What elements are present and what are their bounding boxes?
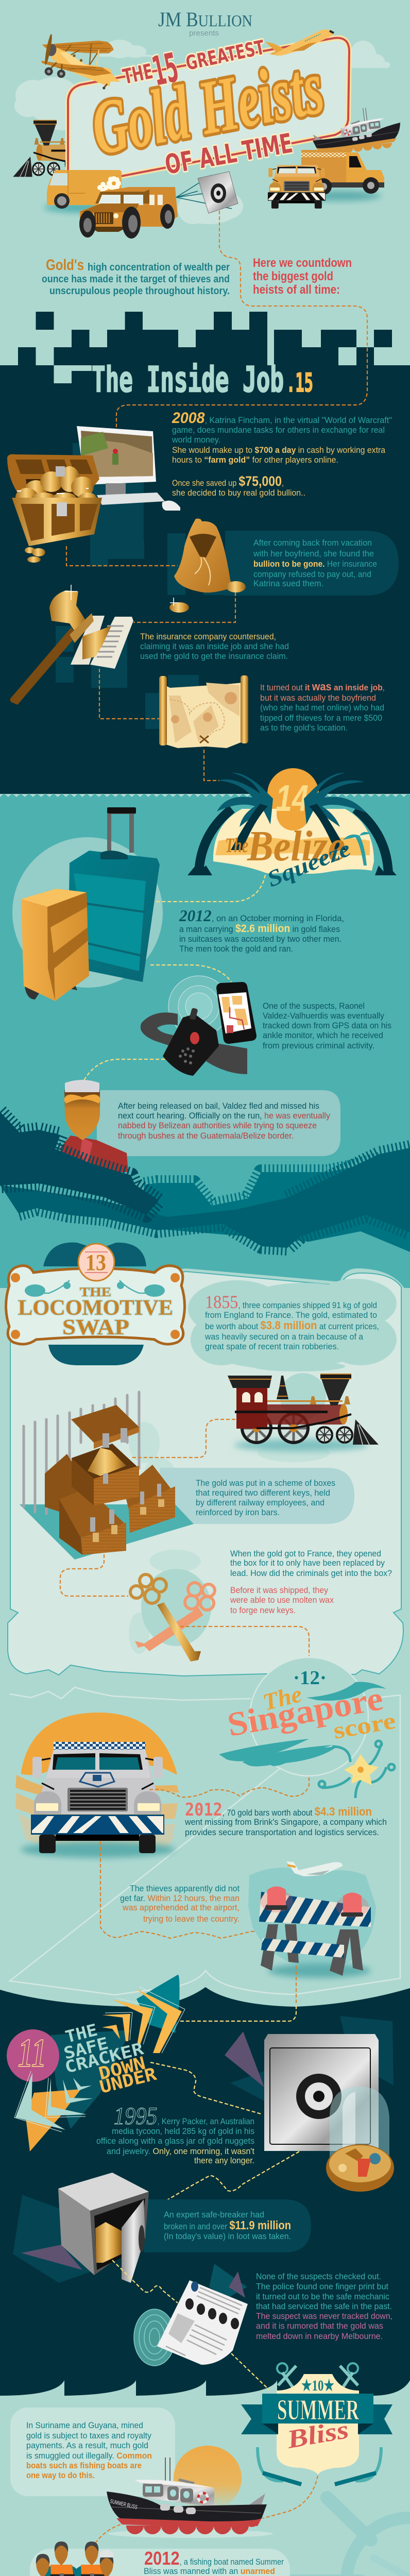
badge: the safe cracker down under [7, 1975, 185, 2151]
text block: apprehended: The thieves apparently did not [130, 1884, 240, 1893]
arrow: dashed route from title to safe [150, 2062, 263, 2114]
text block: safe breaker: broken in and over $11.9 million [164, 2218, 291, 2232]
illustration: ship wheel watermark [293, 2498, 410, 2576]
illustration: jet airliner [265, 29, 334, 56]
arrow: dashed route from barricade to safe cracker [296, 1965, 297, 2004]
text block: suriname and guyana: boats such as fishing boats are [26, 2461, 142, 2470]
title: the safe cracker [62, 2020, 146, 2077]
arrow: dashed route from monitor to suspect [82, 1059, 165, 1083]
text block: bail and capture: After being released on bail, Valdez fled and missed his [118, 1101, 319, 1111]
text block: two keys: that required two different keys, held [196, 1488, 330, 1498]
text block: it was an inside job: (who she had met online) who had [260, 703, 384, 713]
text block: it was an inside job: It turned out it was an inside job, [260, 680, 385, 693]
text block: bullion gone: bullion to be gone. Her insurance [253, 559, 377, 569]
background: dark safe cracker section [0, 1987, 410, 2396]
text block: it was an inside job: tipped off thieves for a mere $500 [260, 713, 382, 723]
illustration: crew in life vests [26, 2541, 124, 2576]
illustration: red locomotive [228, 1374, 379, 1451]
icon: crossed oars and anchors [258, 2363, 381, 2484]
icon: left palm [217, 773, 273, 850]
title: belize: Belize [247, 822, 345, 870]
title: squeeze: Squeeze [263, 836, 354, 892]
text block: suriname and guyana: gold is subject to taxes and royalty [26, 2431, 151, 2441]
text block: how criminals got in: Before it was shipped, they [230, 1585, 328, 1595]
text block: how criminals got in: lead. How did the criminals get into the box? [230, 1568, 392, 1578]
text block: suriname and guyana: payments. As a result, much gold [26, 2441, 148, 2450]
text block: suspects checked out: and it is rumored that the gold was [256, 2321, 383, 2331]
text block: how criminals got in [230, 1549, 392, 1615]
text block: two keys: The gold was put in a scheme of boxes [196, 1478, 335, 1488]
text block: apprehended: trying to leave the country. [143, 1914, 240, 1924]
text block: 1995 kerry packer: there any longer. [194, 2156, 254, 2165]
text block: suriname and guyana [26, 2420, 152, 2480]
illustration: armored truck front [21, 1742, 175, 1858]
text: number 10: ★10★ [301, 2377, 334, 2394]
icon: box front [59, 1488, 126, 1555]
arrow: dashed route from truck to barricade [100, 1841, 267, 1938]
text block: safe breaker: An expert safe-breaker had [164, 2210, 264, 2219]
heading: the inside job: The Inside Job [92, 360, 284, 400]
arrow: dashed route from belize badge to suitcases [156, 875, 265, 902]
arrow: dashed route from intro to inside job [116, 211, 367, 427]
title: the 15 greatest: GREATEST [184, 36, 267, 75]
illustration: gps rings [168, 976, 229, 1037]
text block: countersued: The insurance company countersued, [140, 632, 276, 641]
text: number 14: 14 [276, 778, 309, 819]
illustration: stolen safe door with ropes [176, 172, 238, 213]
illustration: treasure chest [7, 454, 102, 563]
text block: countersued: used the gold to get the insurance claim. [140, 651, 288, 661]
illustration: gps phone and ankle monitor [141, 982, 257, 1076]
text: number 13: 13 [86, 1250, 106, 1275]
text block: bail and capture [118, 1101, 330, 1141]
arrow: dashed route from boxes to keys [60, 1554, 128, 1596]
illustration: truck front view [268, 165, 326, 209]
text block: 1995 kerry packer [96, 2103, 254, 2165]
title: down under: UNDER [98, 2064, 159, 2098]
illustration: caged gold boxes [20, 1392, 194, 1560]
arrow: dashed route from chest to sack [66, 546, 178, 566]
title: of all time: OF ALL TIME [163, 128, 295, 181]
icon: light boomerangs [15, 2073, 93, 2130]
logo: JM Bullion: JM BULLION [158, 8, 252, 31]
text block: it was an inside job: as to the gold's location. [260, 723, 348, 733]
title: summer: SUMMER [277, 2394, 359, 2426]
illustration: wavy bands behind barricade [248, 1868, 376, 1971]
text block: 2012 fishing boat [144, 2548, 284, 2576]
title: singapore: Singapore [225, 1680, 386, 1744]
illustration: police barricade [259, 1887, 371, 1978]
title: the safe cracker: CRACKER [63, 2039, 146, 2077]
illustration: glass jar of jewels [326, 2087, 394, 2192]
text block: suspects checked out: The police found one finger print but [256, 2281, 388, 2292]
illustration: triangles by dossier [209, 2264, 247, 2298]
illustration: flower van [44, 170, 131, 213]
illustration: armored truck side [299, 150, 384, 201]
title: the 15 greatest [121, 36, 267, 95]
text block: intro gold: unscrupulous people throughout history. [49, 285, 230, 297]
arrow: dashed route from sack to axe [133, 592, 235, 622]
panel: bail callout [97, 1090, 340, 1156]
text block: 2012 florida: a man carrying $2.6 million in gold flakes [179, 923, 340, 935]
illustration: title sign [68, 38, 349, 178]
title: the locomotive swap: LOCOMOTIVE [18, 1296, 173, 1320]
text block: 2012 brinks singapore: went missing from Brink's Singapore, a company which [184, 1817, 387, 1827]
text block: 1855 shipment [204, 1292, 379, 1351]
icon: box left [45, 1454, 85, 1520]
text block: how criminals got in: the box for it to only have been replaced by [230, 1558, 385, 1568]
icon: right palm [304, 773, 366, 850]
arrow: dashed route from safe to dossier [112, 2260, 178, 2303]
text block: 1855 shipment: 1855, three companies shipped 91 kg of gold [205, 1292, 377, 1312]
arrow: dashed route from suitcases to phone [150, 965, 231, 982]
text block: 1995 kerry packer: and jewelry. Only, one morning, it wasn't [107, 2146, 254, 2156]
text block: intro countdown: Here we countdown [253, 256, 352, 270]
illustration: sun behind boat [174, 2446, 242, 2511]
illustration: dark bush [0, 1112, 159, 1215]
text block: 2012 florida [179, 906, 344, 954]
illustration: front bushes [0, 1148, 410, 1248]
text block: bail and capture: next court hearing. Officially on the run, he was eventually [118, 1111, 330, 1121]
text block: bail and capture: nabbed by Belizean authorities while trying to squeeze [118, 1121, 317, 1130]
text block: suriname and guyana: In Suriname and Guyana, mined [26, 2420, 143, 2430]
arrow: dashed route from train to boxes [132, 1419, 235, 1458]
panel: suriname callout [10, 2408, 175, 2496]
illustration: big closed safe [264, 2034, 379, 2151]
text block: suspects checked out: None of the suspects checked out. [256, 2272, 381, 2281]
illustration: summer bliss boat [107, 2458, 273, 2538]
text block: how criminals got in: When the gold got to France, they opened [230, 1549, 381, 1558]
illustration: sun and wavy bands [15, 1713, 179, 1850]
text block: ankle monitor: tracked down from GPS data on his [263, 1021, 391, 1030]
illustration: gold sack [169, 519, 246, 613]
text block: 1855 shipment: was heavily secured on a train because of a [204, 1332, 363, 1342]
title: the: The [225, 834, 248, 857]
illustration: background clouds [14, 40, 390, 224]
text block: 2008 katrina fincham: game, does mundane tasks for others in exchange for real [172, 425, 385, 435]
icon: right siren [336, 1893, 369, 1918]
text block: it was an inside job: but it was actually the boyfriend [260, 693, 376, 703]
text block: safe breaker [164, 2210, 291, 2241]
text block: countersued [140, 632, 289, 661]
text block: two keys: by different railway employees, and [196, 1498, 324, 1507]
text block: 2012 florida: in suitcases was accosted by two other men. [179, 934, 341, 944]
arrow: dashed route from boat to crew [95, 2524, 121, 2543]
text block: 2012 brinks singapore: provides secure transportation and logistics services. [185, 1827, 379, 1837]
text block: how criminals got in: were able to use molten wax [230, 1595, 334, 1605]
badge: the locomotive swap [6, 1243, 184, 1365]
title: the locomotive swap: THE [80, 1285, 111, 1299]
text block: suspects checked out: The suspect was never tracked down, [256, 2311, 392, 2321]
illustration: axe and torn contract [10, 585, 133, 705]
arrow: dashed route between safes [149, 2151, 299, 2211]
panel: fishing boat callout [30, 2549, 290, 2576]
text block: ankle monitor: One of the suspects, Raonel [263, 1001, 365, 1011]
background: dark inside job section with pixel skyline [0, 312, 410, 794]
text block: it was an inside job [260, 680, 385, 733]
text block: 2008 katrina fincham: 2008, Katrina Fincham, in the virtual "World of Warcraft" [172, 410, 392, 427]
text: number 12: ·12· [293, 1667, 327, 1689]
panel: scheme of boxes callout [160, 1468, 354, 1524]
title: down under [97, 2053, 159, 2098]
title: the 15 greatest: 15 [148, 45, 182, 95]
text block: bullion gone [253, 538, 377, 588]
arrow: dashed wavy route from singapore to truck [149, 1777, 309, 1797]
text block: ankle monitor [263, 1001, 391, 1050]
text block: 2012 florida: 2012, on an October morning in Florida, [179, 906, 344, 925]
arrow: dashed route from contract to map [99, 669, 163, 719]
illustration: faint damask flourishes [129, 1422, 330, 1654]
icon: arch legs [199, 809, 388, 875]
text block: 2008 katrina fincham: world money. [172, 435, 220, 445]
decorative pixel blocks [56, 443, 240, 729]
icon: small palm [343, 832, 371, 866]
illustration: humvee [79, 187, 178, 239]
text block: intro countdown: heists of all time: [253, 283, 340, 297]
illustration: back bushes [142, 1159, 410, 1252]
text block: 2008 katrina fincham: Once she saved up $75,000, [172, 473, 284, 489]
text block: suspects checked out: it turned out to be the safe mechanic [256, 2292, 389, 2301]
text block: suriname and guyana: is smuggled out illegally. Common [26, 2451, 152, 2461]
title: the safe cracker: SAFE [62, 2033, 110, 2063]
badge: the belize squeeze [187, 768, 397, 892]
illustration: computer monitor game [77, 426, 180, 511]
text block: intro gold: Gold's [46, 257, 84, 274]
text block: 1995 kerry packer: media tycoon, held 285 kg of gold in his [112, 2126, 254, 2136]
illustration: suspect in bushes [60, 1080, 128, 1172]
text block: 2012 florida: The men took the gold and ran. [179, 944, 293, 954]
text block: suriname and guyana: one way to do this. [26, 2470, 95, 2480]
illustration: fishing boat [310, 104, 403, 157]
panel: locomotive swap paper [0, 1268, 407, 1676]
text block: ankle monitor: Valdez-Valhuerdis was eventually [263, 1011, 384, 1021]
title: the safe cracker: THE [63, 2020, 99, 2047]
text block: 2008 katrina fincham: She would make up to $700 a day in cash by working extra [172, 445, 385, 455]
icon: box right [124, 1465, 175, 1533]
text block: 2012 brinks singapore [184, 1800, 387, 1837]
text block: bullion gone: After coming back from vacation [253, 538, 372, 548]
heading: the inside job: .15 [286, 368, 313, 398]
text block: bullion gone: Katrina sued them. [253, 579, 323, 588]
text block: suspects checked out: that had serviced the safe in the past. [256, 2301, 392, 2311]
title: bliss: Bliss [284, 2415, 351, 2454]
icon: left siren [260, 1887, 293, 1912]
text block: intro gold: ounce has made it the target of thieves and [42, 274, 230, 285]
text block: 2012 brinks singapore: 2012, 70 gold bars worth about $4.3 million [185, 1800, 372, 1820]
arrow: dashed route from dossier to summer bliss [231, 2353, 269, 2390]
text: boat name: SUMMER BLISS [109, 2498, 138, 2511]
title: the locomotive swap [18, 1285, 173, 1340]
text block: apprehended: was apprehended at the airport, [122, 1903, 240, 1912]
title: score: score [331, 1707, 398, 1744]
illustration: teal circle behind train [280, 1373, 326, 1419]
text block: 1855 shipment: from England to France. The gold, estimated to [205, 1310, 377, 1320]
illustration: small jet [286, 1861, 343, 1876]
text block: countersued: claiming it was an inside job and she had [140, 641, 289, 651]
illustration: background triangles left [13, 2195, 90, 2283]
panel: vacation callout [225, 531, 399, 596]
decorative zigzag edge [0, 793, 410, 797]
text block: apprehended: get far. Within 12 hours, the man [120, 1893, 240, 1903]
text block: 2008 katrina fincham: hours to “farm gold” for other players online. [172, 455, 338, 465]
text: number 11: 11 [18, 2030, 46, 2075]
text block: suspects checked out [256, 2272, 392, 2341]
text: presents: presents [189, 29, 219, 38]
text block: 2008 katrina fincham: she decided to buy real gold bullion.. [172, 488, 305, 498]
arrow: dashed route from badge to boat [263, 2476, 318, 2518]
illustration: treasure map [159, 675, 248, 748]
illustration: steam locomotive [13, 121, 126, 177]
illustration: police dossier [157, 2280, 248, 2365]
panel: safe breaker callout [144, 2199, 311, 2252]
icon: yellow boomerangs [102, 1989, 182, 2053]
text block: ankle monitor: ankle monitor, which he received [263, 1030, 383, 1040]
icon: flower ornament [319, 1741, 395, 1798]
text block: bullion gone: with her boyfriend, she found the [253, 549, 374, 558]
text block: two keys: reinforced by iron bars. [196, 1507, 280, 1517]
text block: 2008 katrina fincham [172, 410, 392, 498]
illustration: biplane [36, 30, 127, 92]
illustration: suitcases [12, 807, 163, 1001]
text block: intro gold [42, 257, 230, 297]
text block: intro countdown [253, 256, 352, 297]
text block: suspects checked out: melted down in nearby Melbourne. [256, 2331, 383, 2341]
text block: 1855 shipment: great spate of recent train robberies. [205, 1342, 339, 1351]
badge: summer bliss [241, 2363, 392, 2484]
icon: box lid [71, 1405, 139, 1449]
icon: waves [219, 1682, 386, 1766]
icon: box with gold [72, 1444, 139, 1505]
illustration: fingerprint [134, 2309, 175, 2366]
arrow: dashed route from keys to singapore [180, 1626, 309, 1656]
badge: the singapore score [219, 1657, 398, 1798]
text block: apprehended [120, 1884, 240, 1924]
text block: 2012 fishing boat: 2012, a fishing boat named Summer [144, 2548, 284, 2569]
text block: 1855 shipment: be worth about $3.8 million at current prices, [205, 1319, 379, 1332]
text block: safe breaker: (In today's value) in loot was taken. [164, 2231, 291, 2241]
decorative boomerang outlines [14, 1987, 185, 2132]
text block: bullion gone: company refused to pay out, and [253, 569, 371, 579]
text block: two keys [196, 1478, 335, 1517]
text block: bail and capture: through bushes at the Guatemala/Belize border. [118, 1131, 294, 1141]
text block: ankle monitor: from previous criminal activity. [263, 1041, 374, 1050]
title: the locomotive swap: SWAP [62, 1316, 129, 1340]
text block: intro gold: high concentration of wealth per [88, 262, 230, 273]
panel: cloud behind 1855 text [188, 1279, 397, 1371]
title: down under: DOWN [97, 2053, 147, 2084]
panel: singapore outline [10, 1687, 400, 1995]
text block: 1995 kerry packer: 1995, Kerry Packer, an Australian [114, 2103, 254, 2130]
text block: intro countdown: the biggest gold [253, 269, 333, 283]
title: the 15 greatest: THE [121, 60, 155, 89]
illustration: background triangles [225, 2016, 394, 2101]
title: the: The [260, 1681, 304, 1716]
text block: how criminals got in: to forge new keys. [230, 1605, 296, 1615]
illustration: open safe with gold [58, 2173, 149, 2283]
arrow: dashed route from map to belize [204, 750, 219, 781]
illustration: crossed keys [130, 1569, 215, 1662]
text block: 2012 fishing boat: Bliss was manned with an unarmed [144, 2566, 275, 2576]
arrow: dashed yellow route into dark section [180, 2005, 296, 2021]
background: teal belize section [0, 797, 410, 1288]
text block: 1995 kerry packer: office along with a glass jar of gold nuggets [96, 2136, 254, 2146]
